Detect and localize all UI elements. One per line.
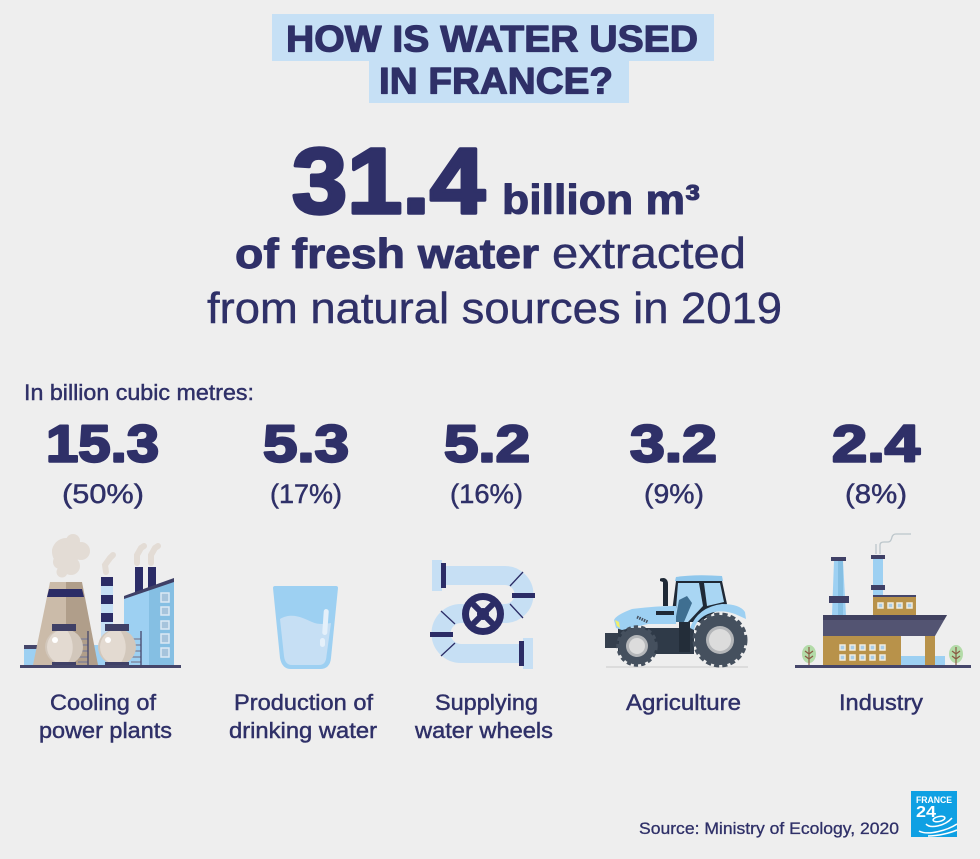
value: 15.3: 15.3 — [46, 416, 159, 474]
headline figure: extracted — [552, 229, 746, 278]
column: industry — [795, 416, 971, 715]
value: 3.2: 3.2 — [630, 416, 717, 474]
label: production of drinking water: drinking water — [229, 718, 377, 743]
label: industry: Industry — [839, 690, 923, 715]
icon: power plant — [20, 534, 181, 668]
headline figure: of fresh water — [235, 230, 539, 277]
unit caption: In billion cubic metres: — [24, 380, 254, 405]
value: 5.2: 5.2 — [444, 416, 530, 474]
title: HOW IS WATER USED — [286, 18, 698, 60]
headline figure: 31.4 — [292, 129, 485, 233]
icon: factory — [795, 534, 971, 668]
icon: pipes and valve — [430, 560, 535, 669]
label: supplying water wheels: Supplying — [435, 690, 538, 715]
label: supplying water wheels — [414, 690, 553, 743]
column: production of drinking water — [229, 416, 377, 743]
headline figure: billion m³ — [502, 176, 700, 223]
column: supplying water wheels — [414, 416, 553, 743]
title — [272, 14, 714, 103]
logo: France 24: 24 — [916, 804, 936, 821]
percent: 16%: (16%) — [450, 479, 523, 509]
label: cooling of power plants — [39, 690, 172, 743]
label: cooling of power plants: power plants — [39, 718, 172, 743]
label: production of drinking water — [229, 690, 377, 743]
percent: 8%: (8%) — [845, 479, 907, 509]
percent: 17%: (17%) — [270, 479, 342, 509]
label: cooling of power plants: Cooling of — [50, 690, 157, 715]
label: supplying water wheels: water wheels — [414, 718, 553, 743]
label: agriculture: Agriculture — [626, 690, 741, 715]
icon: tractor — [605, 575, 748, 668]
label: production of drinking water: Production of — [234, 690, 374, 715]
value: 5.3: 5.3 — [263, 416, 349, 474]
percent: 50%: (50%) — [62, 479, 144, 509]
percent: 9%: (9%) — [644, 479, 704, 509]
logo: France 24 — [911, 791, 957, 837]
icon: glass of water — [273, 586, 338, 669]
column: cooling of power plants — [20, 416, 181, 743]
source note: Source: Ministry of Ecology, 2020 — [639, 819, 899, 838]
column: agriculture — [605, 416, 748, 715]
title: IN FRANCE? — [379, 60, 613, 102]
headline figure — [207, 129, 782, 333]
logo: France 24: FRANCE — [916, 795, 952, 806]
value: 2.4: 2.4 — [832, 416, 920, 474]
headline figure: from natural sources in 2019 — [207, 284, 782, 333]
